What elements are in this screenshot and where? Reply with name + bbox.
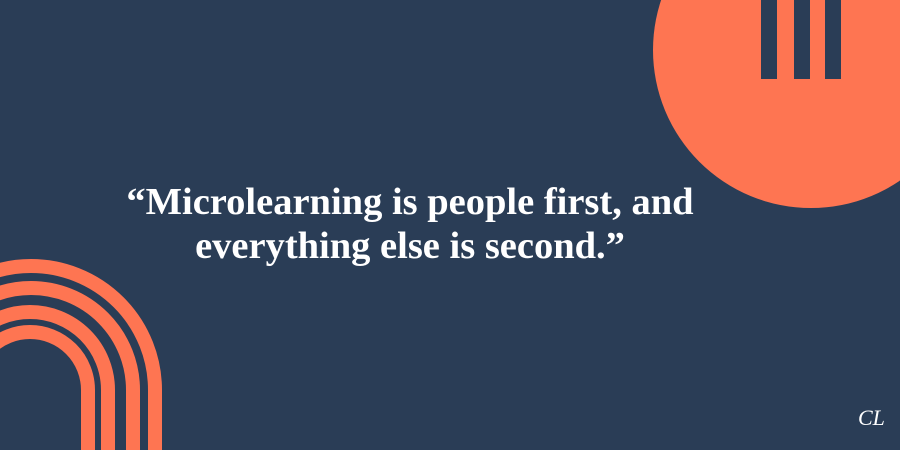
logo: CL: CL [858,405,885,430]
quote text: “Microlearning is people first, and [126,181,694,223]
quote text [126,181,694,267]
quote text: everything else is second.” [195,225,625,267]
